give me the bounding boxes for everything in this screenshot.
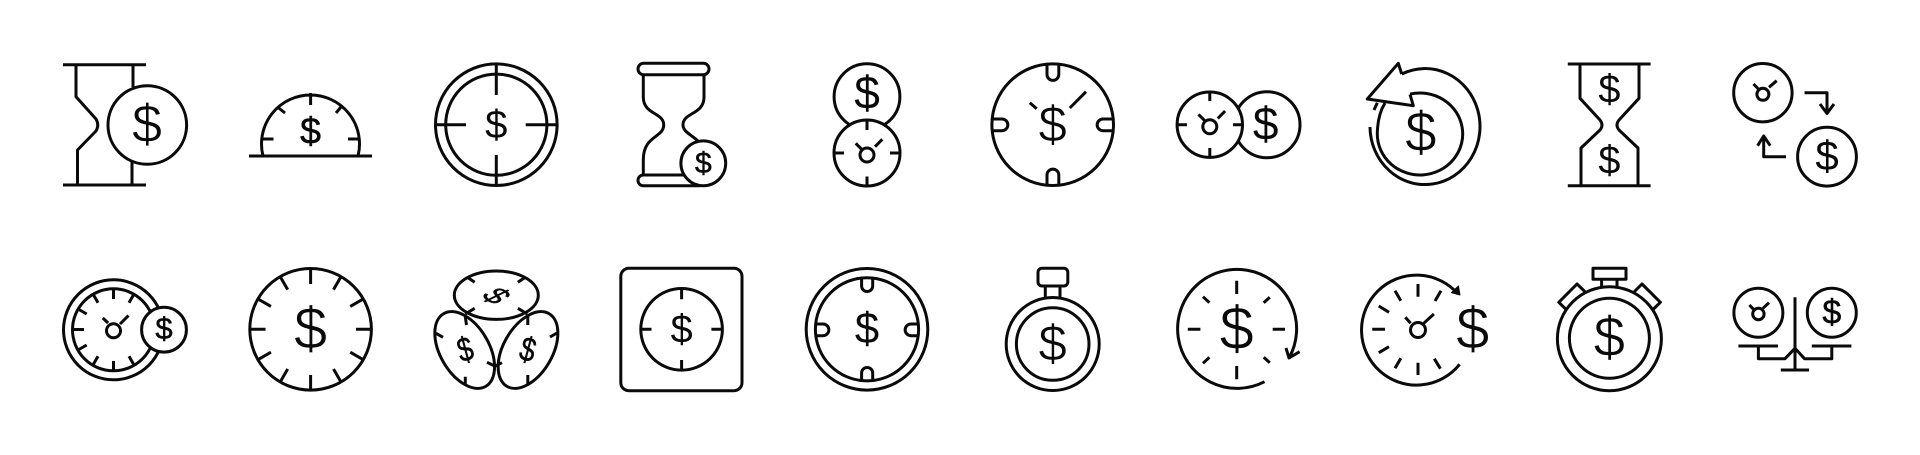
icon: square frame dial — [621, 268, 742, 391]
icon: clock arrow to dollar: $ — [1456, 294, 1489, 361]
icon: scale balancing clock and coin: $ — [1822, 294, 1841, 332]
icon: hourglass with two dollars: $ — [1598, 68, 1620, 112]
icon: coin above clock: $ — [854, 67, 880, 119]
icon: circular return arrow around coin: $ — [1405, 100, 1437, 164]
icon: stopwatch with dollar — [1557, 268, 1661, 391]
icon: clock with ticks and coin — [64, 280, 186, 380]
icon: dial with clockwise arrow: $ — [1220, 295, 1254, 364]
icon: hourglass with two dollars: $ — [1598, 138, 1620, 182]
icon: full dial with dollar — [250, 268, 371, 390]
icon: clock and coin exchange arrows: $ — [1815, 132, 1839, 179]
icon: clock arrow to dollar — [1362, 275, 1489, 385]
icon: three coins in isometric arrangement — [422, 271, 570, 399]
icon: target dial with dollar — [435, 64, 557, 186]
icon: half dial with dollar: $ — [300, 110, 321, 152]
icon: hourglass with two dollars — [1568, 64, 1651, 186]
icon: double ring notched dial — [806, 268, 928, 390]
arrow: coin to clock — [1758, 136, 1786, 157]
icon: clock with ticks and coin: $ — [155, 311, 173, 346]
arrow: clock to coin — [1804, 93, 1834, 114]
icon: pocket watch with dollar — [1006, 268, 1099, 390]
icon: full dial with dollar: $ — [294, 294, 327, 361]
icon: hourglass with coin: $ — [132, 94, 162, 154]
icon: circular return arrow around coin — [1367, 63, 1480, 185]
icon: coin above clock — [834, 64, 900, 186]
icon: notched clock with dollar: $ — [1039, 95, 1067, 152]
icon: half dial with dollar — [249, 93, 372, 156]
icon: target dial with dollar: $ — [485, 103, 507, 147]
icon: sand timer with small coin: $ — [695, 147, 712, 180]
icon: dial with clockwise arrow — [1178, 269, 1300, 388]
icon: scale balancing clock and coin — [1734, 288, 1856, 370]
icon: double ring notched dial: $ — [855, 305, 879, 353]
icon: stopwatch with dollar: $ — [1594, 305, 1625, 368]
icon: three coins in isometric arrangement: $ — [516, 329, 540, 370]
icon: clock beside coin — [1177, 92, 1300, 158]
icon: three coins in isometric arrangement: $ — [453, 329, 477, 370]
icon: clock beside coin: $ — [1253, 98, 1278, 150]
icon: clock and coin exchange arrows — [1734, 63, 1856, 186]
icon: three coins in isometric arrangement: $ — [473, 283, 520, 308]
icon: sand timer with small coin — [638, 63, 726, 186]
icon: notched clock with dollar — [992, 64, 1114, 186]
icon: square frame dial: $ — [671, 307, 693, 351]
icon: pocket watch with dollar: $ — [1039, 314, 1067, 371]
icon: hourglass with coin — [63, 65, 187, 185]
